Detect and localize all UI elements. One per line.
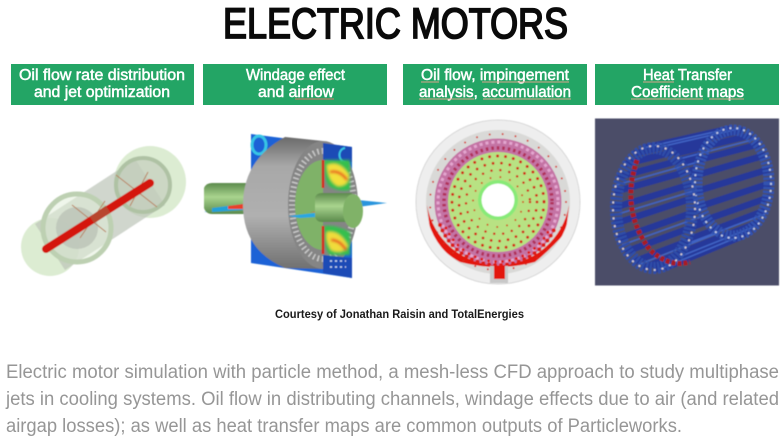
illustration: heat transfer coefficient map bbox=[595, 118, 779, 286]
illustration: oil channels bbox=[21, 146, 186, 276]
header: oil flow impingement bbox=[403, 64, 587, 105]
body text: Electric motor simulation with particle method, a mesh-less CFD approach to study multiphase bbox=[6, 362, 779, 383]
illustration: oil impingement bbox=[416, 120, 580, 284]
body text: jets in cooling systems. Oil flow in distributing channels, windage effects due to air (and related bbox=[5, 389, 779, 410]
header: windage: Windage effect bbox=[246, 67, 346, 84]
header: windage bbox=[203, 64, 387, 105]
caption: courtesy: Courtesy of Jonathan Raisin and TotalEnergies bbox=[275, 309, 524, 321]
header: oil flow rate bbox=[11, 64, 194, 105]
title: ELECTRIC MOTORS bbox=[223, 0, 568, 48]
header: heat transfer bbox=[595, 64, 779, 105]
header: windage: and airflow bbox=[258, 84, 335, 101]
body text: airgap losses); as well as heat transfer maps are common outputs of Particleworks. bbox=[6, 416, 682, 437]
header: oil flow impingement: Oil flow, impingement bbox=[421, 67, 570, 84]
header: oil flow rate: Oil flow rate distribution bbox=[19, 67, 185, 84]
header: oil flow impingement: analysis, accumulation bbox=[419, 84, 571, 101]
header: heat transfer: Coefficient maps bbox=[631, 84, 744, 101]
header: oil flow rate: and jet optimization bbox=[34, 84, 170, 101]
body text bbox=[5, 362, 779, 437]
header: heat transfer: Heat Transfer bbox=[643, 67, 732, 84]
illustration: windage bbox=[204, 134, 387, 278]
